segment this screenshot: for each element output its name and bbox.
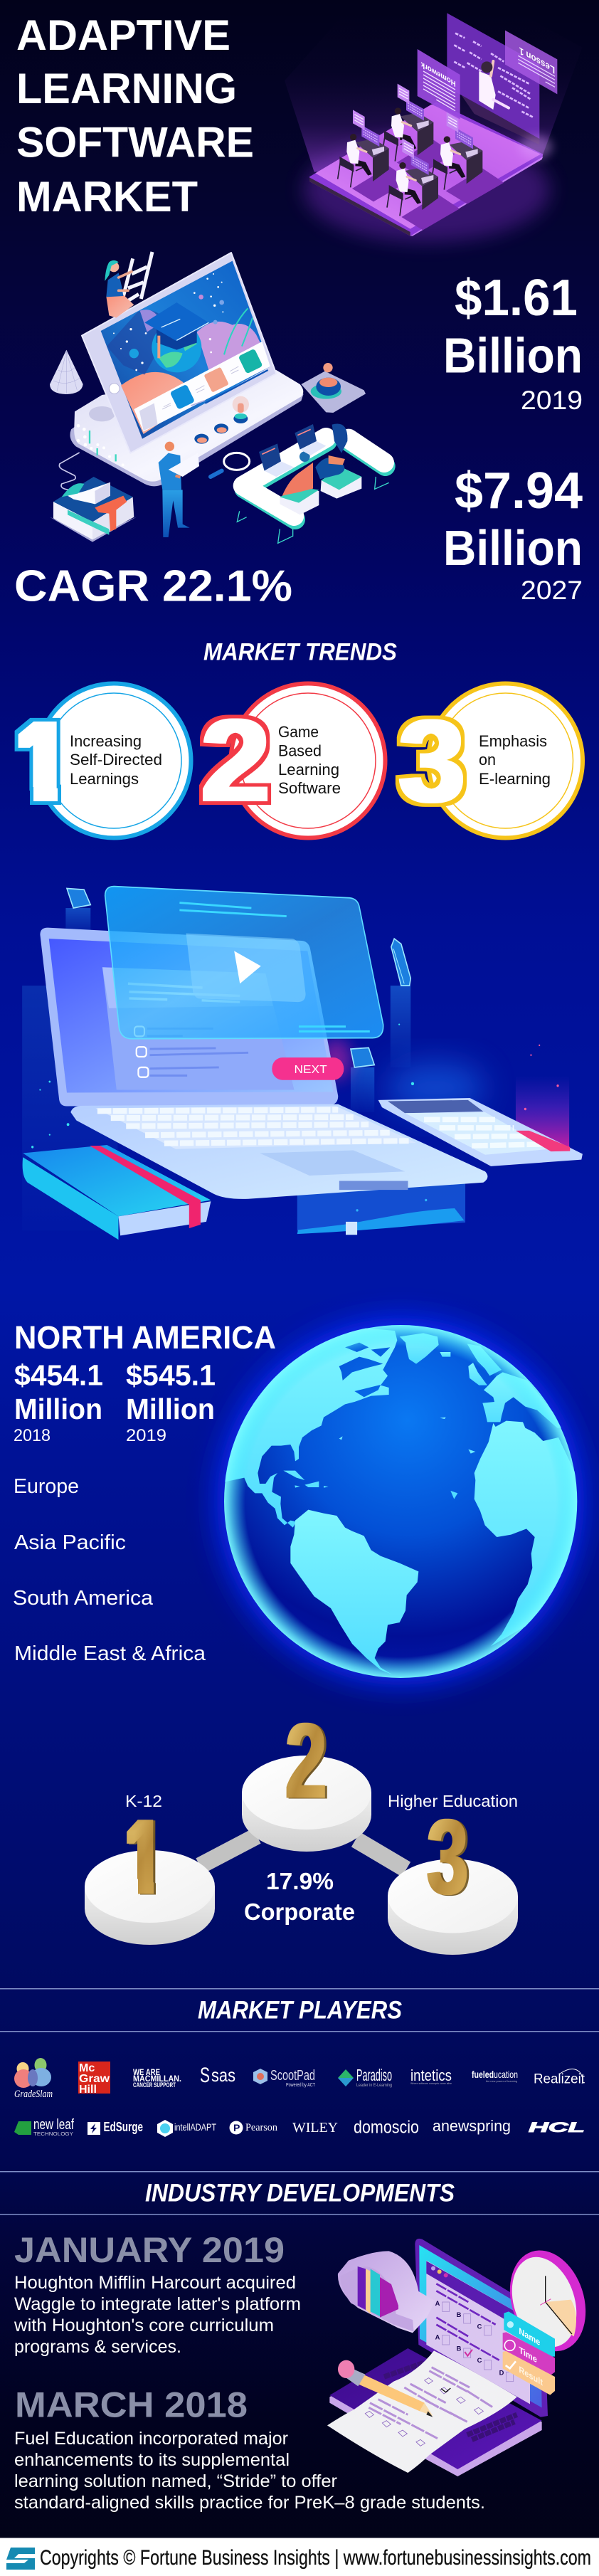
CAGR: CAGR 22.1% — [14, 562, 292, 611]
Iceland — [440, 1352, 450, 1357]
development: March 2018 — [14, 2385, 485, 2513]
logo: Intetics: Where software concepts come alive — [410, 2081, 452, 2085]
heading: market players: MARKET PLAYERS — [198, 1997, 402, 2024]
illustration: laptop with glass panels — [22, 887, 583, 1240]
form tags: Result — [519, 2364, 544, 2388]
small book icon — [67, 889, 90, 908]
market size 2019: 2019 — [521, 386, 583, 415]
laptop screen — [415, 2239, 548, 2417]
logo: ScootPad: ScootPad — [270, 2068, 315, 2084]
logo: GradeSlam — [14, 2058, 53, 2100]
trend 1: Increasing — [70, 732, 142, 750]
logo: Fuel Education: the new power of learning — [486, 2079, 517, 2083]
NEXT button — [272, 1057, 344, 1080]
regional data: North America: NORTH AMERICA — [14, 1319, 276, 1356]
laptop base — [329, 2348, 542, 2476]
North America — [222, 1324, 397, 1528]
trend 2: Game — [278, 723, 319, 741]
pen and glass stand — [297, 1182, 465, 1235]
South America — [290, 1510, 418, 1674]
pencil — [338, 2360, 433, 2417]
development: March 2018: enhancements to its supplemental — [14, 2450, 290, 2470]
region list: Asia Pacific — [14, 1531, 126, 1554]
title — [16, 11, 254, 221]
illustration: isometric online classroom — [285, 13, 582, 242]
logo: A New Spring: anewspring — [433, 2117, 511, 2135]
lesson panel: Lesson 1 — [519, 45, 555, 76]
development: January 2019: with Houghton's core curriculum — [14, 2316, 274, 2335]
logo: Paradiso: Leader in E-Learning — [356, 2084, 392, 2088]
region list: South America — [13, 1587, 154, 1610]
gold numeral 3: 3 — [427, 1797, 468, 1916]
footer — [0, 2538, 599, 2576]
gold numeral 1: 1 — [126, 1797, 161, 1916]
magnifier — [211, 453, 250, 477]
logo: SAS — [200, 2064, 235, 2087]
logo: Macmillan: WE ARE — [133, 2067, 160, 2077]
title: ADAPTIVE — [16, 11, 230, 59]
big teaching screen — [447, 13, 539, 144]
light bulb — [233, 396, 249, 423]
podium 1 — [85, 1850, 215, 1945]
Scandinavia — [467, 1344, 502, 1376]
pencil icon — [391, 939, 410, 986]
round desk with teammates — [237, 423, 389, 543]
title: MARKET — [16, 173, 198, 221]
title: LEARNING — [16, 65, 237, 112]
logo: Domoscio: domoscio — [354, 2118, 419, 2138]
Africa — [475, 1421, 580, 1646]
logos row 1 — [14, 2058, 585, 2100]
market size 2027 — [443, 463, 583, 605]
market size 2019: $1.61 — [455, 270, 578, 327]
tablet base — [70, 370, 304, 486]
podium 2 — [242, 1756, 371, 1852]
segment labels: 17.9% — [266, 1868, 334, 1894]
logo: Fuel Education: fueleducation — [472, 2069, 518, 2080]
trend 2: Based — [278, 741, 322, 760]
laptop screen: A — [435, 2333, 440, 2340]
segment labels — [125, 1792, 518, 1925]
logo: New Leaf Technology: TECHNOLOGY — [33, 2131, 73, 2137]
logo: Fortune Business Insights — [6, 2548, 35, 2570]
logo: intellADAPT: intellADAPT — [174, 2121, 216, 2133]
title: SOFTWARE — [16, 118, 254, 167]
regional data: North America: 2018 — [14, 1426, 51, 1445]
bed with resting person — [50, 477, 137, 542]
trend 1: 1 — [18, 697, 68, 825]
laptop screen: C — [477, 2323, 482, 2330]
logo: Pearson: P — [233, 2122, 240, 2133]
trend 3: E-learning — [479, 770, 551, 788]
exam paper — [327, 2350, 517, 2473]
laptop screen: B — [457, 2345, 462, 2352]
Caribbean and Atlantic islands — [283, 1418, 475, 1499]
logo: New Leaf Technology — [14, 2117, 74, 2137]
floating glass window — [105, 887, 383, 1039]
logo: ScootPad — [253, 2068, 316, 2088]
region list: Middle East & Africa — [14, 1642, 206, 1665]
cone — [50, 350, 83, 394]
market size 2019: Billion — [443, 328, 583, 384]
laptop screen — [40, 928, 338, 1106]
homework panel — [418, 49, 460, 120]
trend 2 — [201, 683, 386, 838]
small book icon — [351, 1047, 374, 1067]
globe — [217, 1318, 584, 1685]
homework panel: Homework — [420, 59, 456, 88]
region list: Europe — [14, 1475, 79, 1498]
heading: market trends: MARKET TRENDS — [203, 639, 397, 666]
logo: Realizeit: Realizeit — [534, 2072, 585, 2086]
logo: EdSurge: EdSurge — [104, 2120, 143, 2134]
logos row 2 — [14, 2117, 585, 2138]
laptop screen: C — [477, 2357, 482, 2364]
development: March 2018: learning solution named, “Stride” to offer — [14, 2471, 337, 2491]
form tags: Time — [519, 2345, 537, 2365]
logo: Wiley: WILEY — [292, 2120, 338, 2136]
market size 2019 — [443, 270, 583, 415]
development: March 2018: standard-aligned skills practice for PreK–8 grade students. — [14, 2493, 485, 2513]
trend 2: Software — [278, 779, 341, 797]
Greenland — [400, 1333, 439, 1364]
blue book — [23, 1145, 211, 1240]
development: January 2019: JANUARY 2019 — [14, 2230, 285, 2270]
development: January 2019: Houghton Mifflin Harcourt acquired — [14, 2273, 296, 2293]
laptop screen: A — [435, 2300, 440, 2307]
market size 2027: 2027 — [521, 576, 583, 605]
control plate — [301, 363, 366, 413]
laptop screen: B — [457, 2311, 462, 2318]
tablet — [82, 253, 276, 453]
market size 2027: Billion — [443, 520, 583, 576]
logo: McGraw Hill — [78, 2062, 110, 2096]
illustration: tablet with learners — [50, 252, 389, 543]
logo: ScootPad: Powered by ACT — [286, 2083, 316, 2088]
cable — [59, 453, 80, 490]
logo: Pearson: Pearson — [245, 2122, 277, 2133]
logo: Macmillan: CANCER SUPPORT — [133, 2081, 176, 2089]
development: January 2019 — [14, 2230, 301, 2357]
trend 1: Learnings — [70, 770, 139, 788]
trend 1: Self-Directed — [70, 751, 162, 769]
segment labels: Corporate — [244, 1899, 355, 1925]
woman on ladder — [105, 252, 152, 318]
gold numeral 2: 2 — [285, 1701, 327, 1820]
trend 3: Emphasis — [479, 732, 547, 750]
development: January 2019: Waggle to integrate latter's platform — [14, 2294, 301, 2314]
trend 3: on — [479, 751, 496, 769]
logo: HCL: HCL — [529, 2121, 585, 2136]
trend 2: 2 — [201, 695, 270, 825]
logo: intellADAPT — [157, 2120, 216, 2137]
calculator — [378, 1098, 583, 1166]
logo: Intetics: intetics — [410, 2066, 452, 2084]
logo: SAS: S — [200, 2064, 210, 2087]
wall clock — [497, 2241, 598, 2361]
logo: Paradiso — [338, 2066, 392, 2088]
regional data: North America: $454.1 — [14, 1359, 103, 1392]
development: January 2019: programs & services. — [14, 2337, 181, 2357]
logo: SAS: sas — [211, 2064, 235, 2086]
round buttons — [194, 423, 228, 444]
logo: Macmillan — [133, 2067, 181, 2089]
logo: EdSurge — [88, 2120, 143, 2135]
logo: McGraw Hill: Hill — [79, 2084, 97, 2096]
NEXT button: NEXT — [294, 1064, 327, 1076]
trend 3 — [399, 683, 583, 838]
market size 2027: $7.94 — [455, 463, 583, 519]
Europe — [482, 1372, 566, 1428]
segment labels: Higher Education — [388, 1792, 518, 1810]
laptop keyboard base — [70, 1104, 487, 1199]
logo: New Leaf Technology: new leaf — [33, 2117, 74, 2133]
region list — [13, 1475, 206, 1665]
logo: McGraw Hill: Mc — [79, 2062, 95, 2074]
regional data: North America: Million — [14, 1393, 102, 1425]
heading: industry developments: INDUSTRY DEVELOPMENTS — [145, 2179, 455, 2207]
logo: Paradiso: Paradiso — [356, 2066, 392, 2084]
development: March 2018: MARCH 2018 — [15, 2385, 248, 2425]
segment connector bars — [200, 1836, 406, 1869]
podium 3 — [388, 1859, 518, 1955]
logo: GradeSlam: GradeSlam — [14, 2089, 53, 2100]
cloud with books — [338, 2251, 435, 2333]
regional data: North America: $545.1 — [126, 1359, 216, 1392]
development: March 2018: Fuel Education incorporated major — [14, 2429, 288, 2449]
logo: Pearson — [229, 2121, 277, 2135]
trend 2: Learning — [278, 761, 339, 778]
reading man with book and laptop — [159, 442, 199, 537]
regional data: North America: Million — [126, 1393, 215, 1425]
segment labels: K-12 — [125, 1792, 162, 1810]
regional data: North America: 2019 — [126, 1426, 166, 1445]
form tags: Name — [519, 2326, 540, 2348]
form tags — [503, 2311, 555, 2395]
trend 3: 3 — [399, 696, 465, 826]
logo: Macmillan: MACMILLAN. — [133, 2074, 181, 2084]
trend 1 — [18, 683, 191, 838]
illustration: online exam on laptop — [327, 2239, 598, 2476]
laptop screen: D — [499, 2369, 504, 2376]
lesson panel — [505, 31, 557, 94]
logo: McGraw Hill: Graw — [79, 2073, 110, 2085]
regional data: North America — [14, 1319, 276, 1445]
